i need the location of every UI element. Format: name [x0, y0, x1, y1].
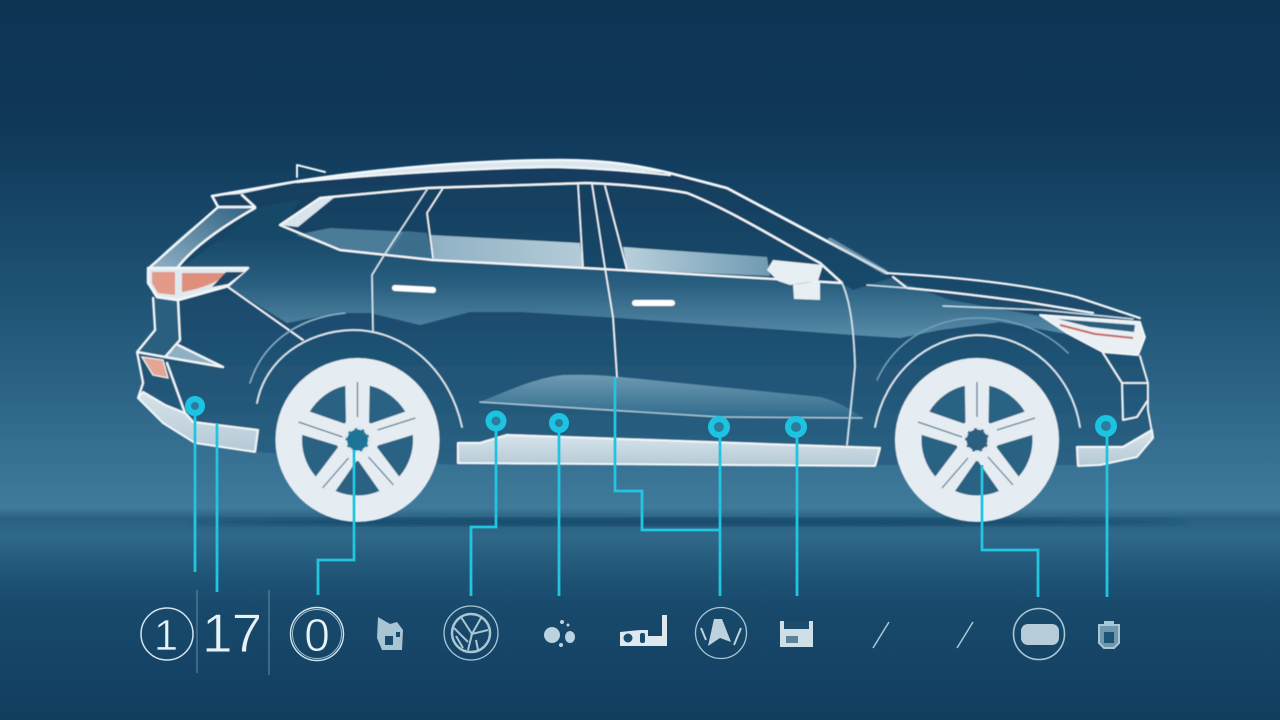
headlight — [1040, 315, 1145, 355]
rear pillar — [427, 188, 443, 258]
headlight dark strip — [1058, 319, 1135, 332]
leader 9 — [982, 465, 1038, 597]
side mirror — [767, 260, 823, 300]
divider left — [196, 590, 198, 673]
rear crease — [228, 287, 303, 340]
callout markers — [188, 399, 1114, 435]
front door window lit band — [623, 247, 770, 276]
lower reflector — [142, 357, 168, 378]
leader 1 — [194, 415, 196, 572]
leader 4 — [471, 430, 496, 596]
icon: triangle badge — [696, 608, 746, 658]
icon: box — [780, 621, 813, 647]
side sill — [458, 435, 880, 466]
number 1 badge: 1 — [154, 611, 178, 660]
car illustration — [137, 160, 1153, 522]
icon: factory — [620, 615, 667, 646]
hood crease — [893, 277, 1093, 313]
hatch glass — [150, 207, 255, 267]
icon: fluid bottle — [1099, 621, 1119, 648]
rear wheel arch — [257, 330, 462, 427]
roof band — [212, 160, 670, 196]
rear door cut — [372, 188, 428, 332]
leader 3 — [318, 450, 354, 595]
car outline strokes — [137, 160, 1153, 445]
icon: wheel tread badge — [444, 606, 498, 660]
rear fin — [165, 345, 223, 367]
slash mark 1 — [873, 622, 889, 648]
sill crease — [480, 402, 862, 418]
rim windows — [298, 382, 417, 496]
rear door window lit band — [430, 235, 583, 268]
hub — [346, 428, 370, 452]
rear outer arc — [250, 313, 345, 383]
rear lower panel — [137, 298, 180, 357]
icon: bubbles — [544, 620, 575, 647]
tail lamp upper — [148, 268, 248, 300]
ground shadow — [190, 518, 1190, 526]
door handle rear — [395, 288, 433, 290]
number 1 badge — [141, 608, 193, 660]
rim windows — [917, 382, 1037, 496]
leader 2 — [216, 424, 218, 592]
hatch — [150, 195, 255, 267]
quarter window lit band right — [387, 231, 433, 259]
front wheel arch — [875, 335, 1080, 427]
door handle front — [635, 300, 672, 306]
slash mark 2 — [957, 622, 973, 648]
rear wheel — [276, 358, 440, 522]
quarter window bright edge — [280, 196, 336, 227]
divider right — [268, 590, 270, 675]
icon: parts bag — [377, 617, 403, 650]
marker 4 — [488, 414, 504, 428]
rear lower body — [137, 298, 223, 422]
marker 7 — [711, 419, 727, 435]
front door cut — [842, 283, 855, 445]
leader 5 — [558, 432, 560, 596]
marker 8 — [788, 419, 804, 435]
tyre and rim — [895, 358, 1059, 522]
tail lamp glass — [212, 272, 244, 287]
spoke grooves — [918, 382, 1035, 488]
front bumper — [1077, 430, 1153, 466]
bottom icon row — [141, 590, 1119, 675]
leader 8 — [796, 436, 798, 596]
roof rail — [212, 160, 887, 273]
hood streaks — [867, 285, 1133, 319]
marker 10 — [1098, 418, 1114, 434]
marker 5 — [552, 416, 566, 430]
hub — [965, 428, 989, 452]
front wheel — [895, 358, 1059, 522]
leader 6 — [615, 377, 720, 530]
tail lamp right red — [182, 273, 226, 292]
windshield streak — [830, 240, 885, 272]
number 0 badge: 0 — [304, 609, 330, 661]
lower door pod — [480, 375, 862, 418]
icon: engine badge — [1014, 608, 1064, 660]
marker 1 — [188, 399, 202, 413]
leader 7 — [719, 436, 721, 596]
spoke grooves — [298, 382, 416, 488]
number 17: 17 — [202, 602, 261, 664]
callout leader lines — [195, 377, 1107, 597]
spoiler fin — [297, 165, 325, 177]
roof lower line — [297, 167, 670, 182]
front outer arc — [877, 318, 1068, 380]
front fascia — [1103, 353, 1153, 437]
headlight red strip — [1060, 325, 1133, 338]
tail lamp left red — [152, 272, 175, 295]
body silhouette — [137, 160, 1153, 465]
quarter window lit band — [296, 228, 433, 259]
tyre and rim — [276, 358, 440, 522]
leader 10 — [1106, 436, 1108, 597]
body shoulder highlight — [180, 200, 1067, 338]
hood lines — [887, 273, 1140, 318]
number 0 badge — [290, 608, 344, 661]
rear bumper — [138, 392, 258, 452]
window frame — [280, 183, 842, 283]
center pillar lines — [578, 184, 627, 377]
